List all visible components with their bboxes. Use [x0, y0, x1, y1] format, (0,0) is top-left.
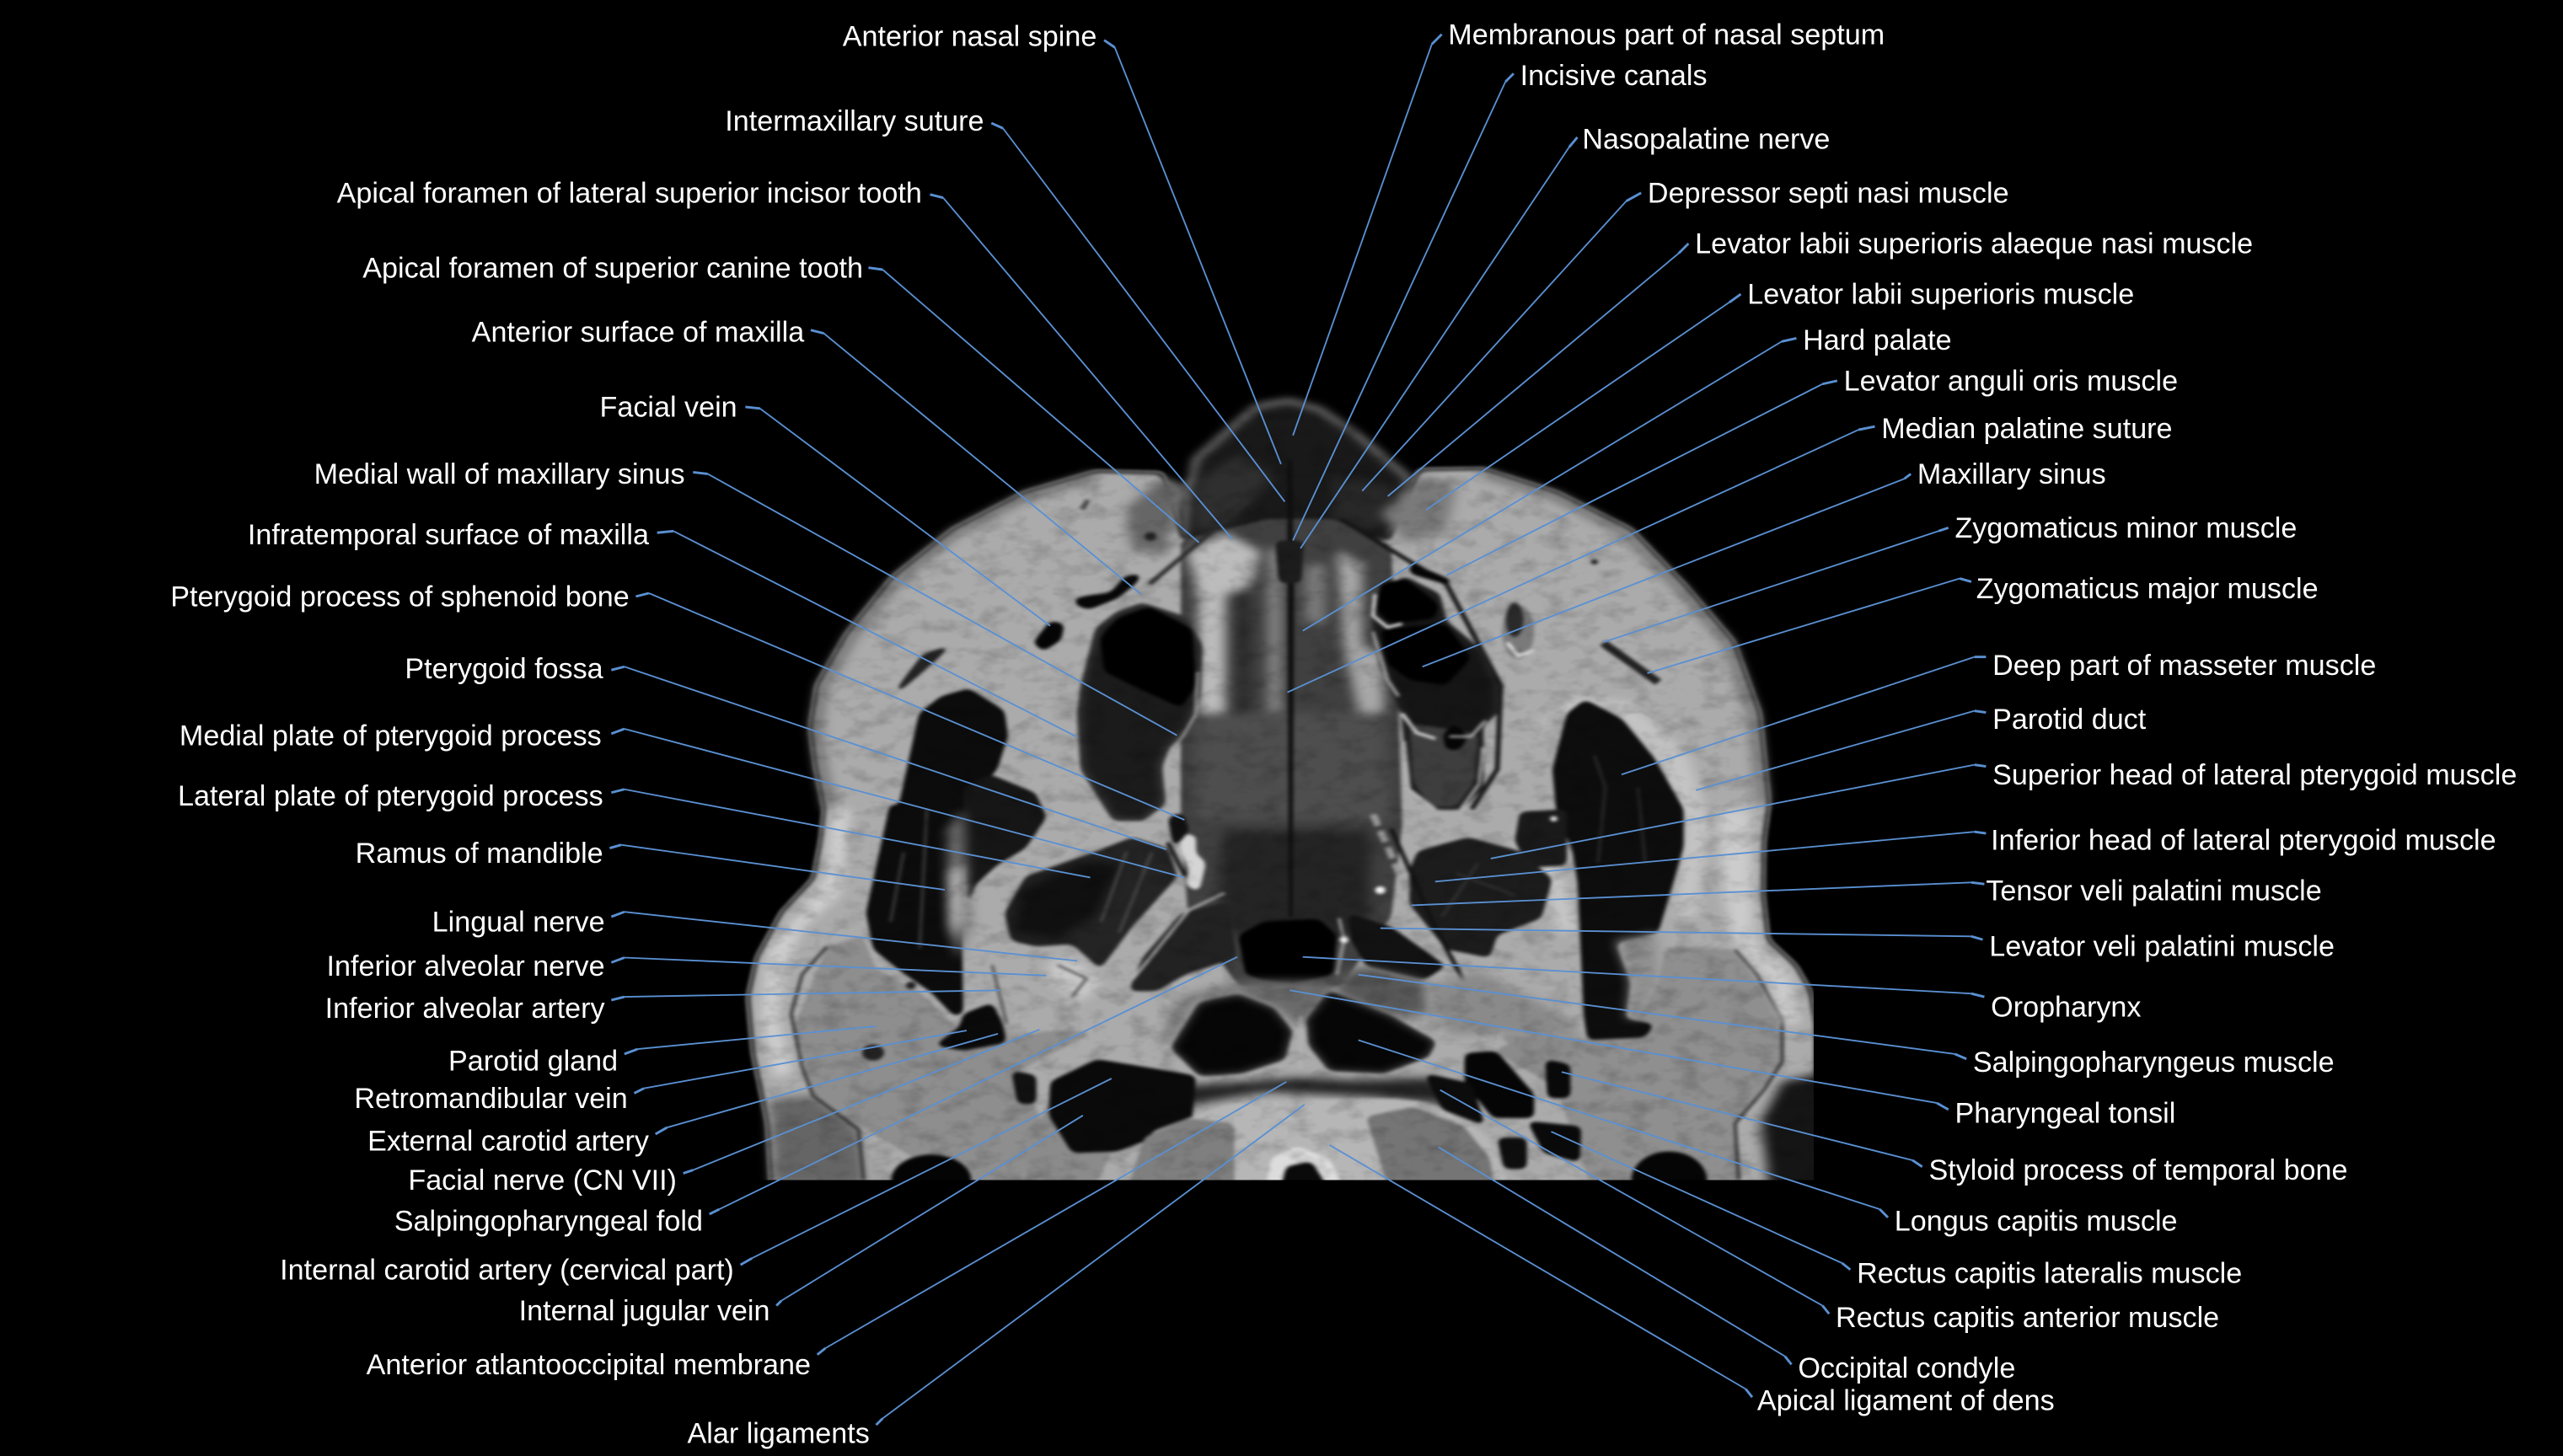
left longus capitis muscle	[1172, 994, 1292, 1076]
right dark streak near zygomaticus	[1603, 643, 1658, 682]
left bright pharyngeal fat	[1178, 834, 1206, 893]
label: Levator labii superioris muscle	[1426, 279, 2134, 510]
lower black areas	[892, 1154, 971, 1205]
label: Deep part of masseter muscle: Deep part of masseter muscle	[1992, 650, 2376, 682]
label: Nasopalatine nerve	[1300, 123, 1830, 549]
label: Tensor veli palatini muscle	[1412, 875, 2322, 907]
label: Inferior head of lateral pterygoid muscle: Inferior head of lateral pterygoid muscle	[1991, 824, 2496, 856]
label: Anterior nasal spine: Anterior nasal spine	[843, 20, 1097, 52]
label: Oropharynx	[1303, 957, 2141, 1023]
central nasal and palatal column	[1181, 519, 1402, 987]
label: Median palatine suture	[1287, 413, 2173, 693]
right longus capitis muscle	[1307, 991, 1435, 1073]
label: Rectus capitis anterior muscle	[1440, 1090, 2219, 1334]
label: Anterior atlantooccipital membrane	[367, 1082, 1286, 1381]
label: Salpingopharyngeal fold: Salpingopharyngeal fold	[394, 1205, 703, 1237]
label: Pterygoid fossa	[405, 653, 1166, 849]
label: Longus capitis muscle	[1359, 1040, 2178, 1237]
label: Apical foramen of superior canine tooth: Apical foramen of superior canine tooth	[362, 253, 863, 285]
label: Anterior surface of maxilla: Anterior surface of maxilla	[472, 316, 804, 348]
label: Intermaxillary suture	[725, 105, 1284, 501]
label: Internal carotid artery (cervical part)	[280, 1079, 1112, 1287]
label: Zygomaticus major muscle: Zygomaticus major muscle	[1976, 573, 2319, 605]
label: Internal jugular vein: Internal jugular vein	[519, 1295, 769, 1327]
label: Styloid process of temporal bone: Styloid process of temporal bone	[1928, 1154, 2347, 1186]
lower lateral dark corners	[770, 1095, 866, 1186]
label: Membranous part of nasal septum: Membranous part of nasal septum	[1448, 19, 1885, 51]
label: Lateral plate of pterygoid process: Lateral plate of pterygoid process	[178, 780, 603, 812]
label: Membranous part of nasal septum	[1293, 19, 1885, 436]
bright fat bands	[1533, 696, 1710, 917]
label: Occipital condyle: Occipital condyle	[1798, 1352, 2015, 1384]
label: Infratemporal surface of maxilla: Infratemporal surface of maxilla	[248, 519, 649, 551]
label: Nasopalatine nerve: Nasopalatine nerve	[1582, 123, 1830, 155]
label: Tensor veli palatini muscle: Tensor veli palatini muscle	[1986, 875, 2322, 907]
label: Depressor septi nasi muscle: Depressor septi nasi muscle	[1648, 177, 2009, 209]
label: Medial plate of pterygoid process: Medial plate of pterygoid process	[180, 720, 602, 752]
label: Pterygoid process of sphenoid bone	[170, 581, 1184, 820]
right masseter lower fat	[1617, 933, 1660, 1019]
left lateral pterygoid muscle	[1005, 837, 1178, 969]
patches beside nose	[1381, 476, 1456, 543]
label: Incisive canals: Incisive canals	[1520, 60, 1708, 92]
label: Superior head of lateral pterygoid muscle	[1491, 759, 2517, 859]
label: Inferior head of lateral pterygoid muscle	[1435, 824, 2496, 881]
label: Parotid gland: Parotid gland	[448, 1045, 618, 1077]
label: Levator veli palatini muscle: Levator veli palatini muscle	[1989, 931, 2335, 963]
right lateral pterygoid muscle	[1409, 837, 1552, 958]
nose soft tissue	[1181, 400, 1409, 546]
left parapharyngeal dark region	[1129, 902, 1236, 991]
left masseter muscle	[866, 688, 1008, 1016]
label: Oropharynx: Oropharynx	[1991, 991, 2141, 1023]
right oval vessel	[1502, 605, 1534, 659]
label: Hard palate	[1303, 324, 1952, 631]
label: External carotid artery	[367, 1034, 998, 1157]
label: Apical ligament of dens	[1330, 1145, 2055, 1417]
label: Parotid duct: Parotid duct	[1992, 704, 2147, 736]
label: Inferior alveolar nerve: Inferior alveolar nerve	[327, 950, 605, 982]
label: Styloid process of temporal bone	[1562, 1072, 2347, 1186]
label: Anterior atlantooccipital membrane: Anterior atlantooccipital membrane	[367, 1349, 811, 1381]
label: Inferior alveolar nerve	[327, 950, 1046, 982]
label: Lateral plate of pterygoid process	[178, 780, 1091, 877]
label: Zygomaticus minor muscle	[1604, 512, 2297, 642]
label: Rectus capitis lateralis muscle	[1551, 1132, 2242, 1289]
label: Pharyngeal tonsil	[1290, 990, 2175, 1129]
right labels	[1287, 19, 2517, 1417]
label: Medial wall of maxillary sinus: Medial wall of maxillary sinus	[314, 458, 685, 490]
label: Incisive canals	[1293, 60, 1708, 540]
label: Medial wall of maxillary sinus	[314, 458, 1177, 736]
fat around styloid	[1429, 971, 1585, 1039]
label: Facial nerve (CN VII)	[408, 1030, 1039, 1196]
label: Superior head of lateral pterygoid muscle: Superior head of lateral pterygoid muscle	[1992, 759, 2517, 791]
right masseter muscle	[1552, 699, 1684, 1041]
label: Maxillary sinus: Maxillary sinus	[1917, 458, 2106, 490]
bone bands	[1150, 500, 1250, 584]
label: Levator veli palatini muscle	[1381, 929, 2335, 963]
skin rim and subcutaneous fat	[751, 470, 1814, 1196]
darker fringe of fat	[817, 476, 1097, 809]
left parotid gland	[795, 935, 1097, 1191]
label: Levator labii superioris alaeque nasi muscle: Levator labii superioris alaeque nasi muscle	[1695, 228, 2253, 260]
label: Hard palate: Hard palate	[1803, 324, 1952, 356]
label: Alar ligaments: Alar ligaments	[688, 1417, 870, 1449]
right maxillary sinus cells	[1373, 577, 1497, 809]
label: Anterior surface of maxilla	[472, 316, 1141, 594]
label: Intermaxillary suture: Intermaxillary suture	[725, 105, 984, 137]
label: Inferior alveolar artery: Inferior alveolar artery	[325, 993, 605, 1025]
right carotid and jugular	[1465, 1051, 1534, 1118]
label: Levator labii superioris alaeque nasi muscle	[1388, 228, 2253, 496]
label: Apical foramen of lateral superior incisor tooth: Apical foramen of lateral superior incisor tooth	[337, 177, 922, 209]
label: Pterygoid process of sphenoid bone: Pterygoid process of sphenoid bone	[170, 581, 630, 613]
label: Apical foramen of lateral superior incisor tooth	[337, 177, 1232, 539]
label: Ramus of mandible	[356, 838, 945, 890]
label: Pterygoid fossa: Pterygoid fossa	[405, 653, 603, 685]
right parotid gland	[1497, 947, 1783, 1191]
label: Retromandibular vein	[354, 1030, 967, 1115]
bright strips beside nasal cavity	[1187, 533, 1261, 714]
left carotid and jugular	[1048, 1059, 1196, 1153]
right carotid space chain	[1373, 815, 1409, 897]
label: Apical ligament of dens: Apical ligament of dens	[1757, 1385, 2055, 1417]
left labels	[170, 20, 1305, 1449]
label: Salpingopharyngeus muscle: Salpingopharyngeus muscle	[1973, 1046, 2335, 1079]
label: Medial plate of pterygoid process	[180, 720, 1184, 877]
label: Median palatine suture: Median palatine suture	[1881, 413, 2173, 445]
label: Salpingopharyngeal fold	[394, 957, 1237, 1237]
label: Levator anguli oris muscle: Levator anguli oris muscle	[1844, 366, 2178, 398]
dens arc	[1264, 1146, 1348, 1196]
label: Inferior alveolar artery	[325, 990, 1000, 1025]
label: Apical foramen of superior canine tooth	[362, 253, 1199, 543]
label: Facial vein	[600, 392, 1050, 626]
small flow voids	[906, 982, 916, 989]
label: Levator labii superioris muscle: Levator labii superioris muscle	[1747, 279, 2134, 311]
label: Facial nerve (CN VII): Facial nerve (CN VII)	[408, 1164, 677, 1196]
label: Parotid gland	[448, 1026, 877, 1077]
label: Facial vein: Facial vein	[600, 392, 737, 424]
right occipital condyle	[1366, 1107, 1497, 1196]
label: Alar ligaments	[688, 1105, 1305, 1449]
prevertebral band	[1123, 1078, 1456, 1127]
label: Internal jugular vein	[519, 1116, 1083, 1327]
label: Depressor septi nasi muscle	[1362, 177, 2009, 491]
label: Deep part of masseter muscle	[1622, 650, 2376, 774]
occipital and dens region	[1125, 1098, 1515, 1196]
label: Salpingopharyngeus muscle	[1359, 975, 2335, 1079]
left maxillary sinus	[1079, 604, 1201, 820]
bright skin strips	[761, 809, 850, 1078]
left occipital condyle	[1125, 1118, 1235, 1196]
left mandible ramus strip	[947, 809, 970, 960]
label: Anterior nasal spine	[843, 20, 1281, 464]
label: Maxillary sinus	[1423, 458, 2106, 666]
label: Levator anguli oris muscle	[1446, 366, 2178, 575]
label: Internal carotid artery (cervical part): Internal carotid artery (cervical part)	[280, 1255, 734, 1287]
label: Lingual nerve: Lingual nerve	[432, 906, 605, 938]
label: Pharyngeal tonsil: Pharyngeal tonsil	[1955, 1097, 2175, 1129]
label: Retromandibular vein: Retromandibular vein	[354, 1083, 628, 1115]
pharyngeal wall	[1239, 981, 1337, 1024]
label: Rectus capitis lateralis muscle: Rectus capitis lateralis muscle	[1857, 1257, 2242, 1289]
parotid fascia lines	[791, 947, 864, 1180]
label: Longus capitis muscle: Longus capitis muscle	[1895, 1205, 2178, 1237]
nasal septum	[1288, 460, 1294, 917]
label: Occipital condyle	[1439, 1147, 2015, 1384]
right parapharyngeal dark region	[1348, 913, 1446, 980]
label: Ramus of mandible: Ramus of mandible	[356, 838, 603, 870]
label: Zygomaticus major muscle	[1648, 573, 2319, 673]
oropharynx	[1238, 918, 1337, 983]
label: Parotid duct	[1696, 704, 2147, 790]
label: Zygomaticus minor muscle: Zygomaticus minor muscle	[1955, 512, 2297, 544]
label: Infratemporal surface of maxilla	[248, 519, 1077, 737]
label: Rectus capitis anterior muscle: Rectus capitis anterior muscle	[1836, 1302, 2219, 1334]
label: Lingual nerve	[432, 906, 1077, 961]
MRI axial scan of the head	[751, 400, 1826, 1208]
left facial vein blob	[1032, 620, 1064, 651]
label: External carotid artery: External carotid artery	[367, 1125, 649, 1157]
